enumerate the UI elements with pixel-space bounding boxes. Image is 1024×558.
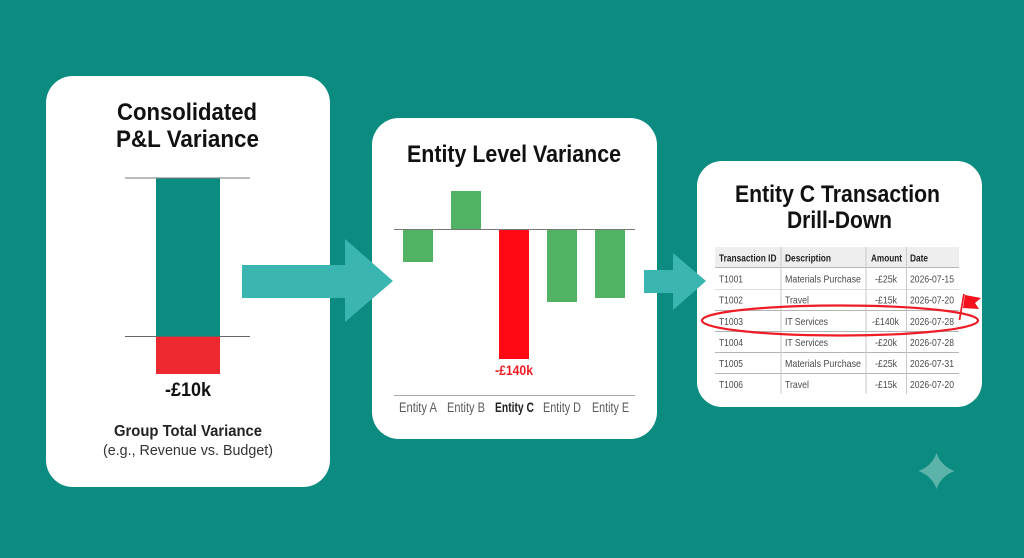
heading: consolidated P&L variance: P&L Variance <box>116 126 259 153</box>
table header: Transaction ID <box>719 252 777 264</box>
table row T1005 <box>719 358 954 370</box>
panel: entity C transaction drill-down <box>697 161 982 407</box>
panel: consolidated P&L variance <box>46 76 330 487</box>
table row T1002: 2026-07-20 <box>910 294 954 306</box>
table row T1005: -£25k <box>875 358 898 370</box>
axis labels: entities: Entity A <box>399 400 437 415</box>
axis labels: entities: Entity D <box>543 400 581 415</box>
table row T1004 <box>719 337 954 349</box>
table row T1002 <box>719 294 954 306</box>
caption: group total variance: (e.g., Revenue vs. Budget) <box>103 442 273 459</box>
table row T1003: T1003 <box>719 316 743 328</box>
table row T1006: -£15k <box>875 379 898 391</box>
heading: consolidated P&L variance: Consolidated <box>117 99 257 126</box>
table row T1003: -£140k <box>872 316 900 328</box>
arrow: entity level to transactions <box>644 253 706 310</box>
icon: red flag <box>960 294 981 320</box>
table row T1003: IT Services <box>785 316 828 328</box>
callout: T1003 highlight ellipse <box>702 306 978 336</box>
table row T1006 <box>719 379 954 391</box>
value label: -£140k: -£140k <box>495 363 533 378</box>
table row T1005: 2026-07-31 <box>910 358 954 370</box>
value label: -£10k: -£10k <box>165 380 211 401</box>
table row T1001: Materials Purchase <box>785 274 861 286</box>
table row T1001 <box>719 274 954 286</box>
arrow: consolidated to entity level <box>242 239 393 322</box>
table row T1006: T1006 <box>719 379 743 391</box>
axis labels: entities: Entity B <box>447 400 485 415</box>
heading: entity level variance: Entity Level Variance <box>407 141 621 168</box>
heading: entity C transaction drill-down: Entity C Transaction <box>735 181 940 208</box>
table row T1004: T1004 <box>719 337 743 349</box>
table row T1004: 2026-07-28 <box>910 337 954 349</box>
caption: group total variance: Group Total Variance <box>114 423 262 440</box>
table row T1005: T1005 <box>719 358 743 370</box>
heading: entity C transaction drill-down <box>735 181 940 234</box>
heading: entity C transaction drill-down: Drill-Down <box>787 207 892 234</box>
caption: group total variance <box>103 423 273 459</box>
table row T1001: -£25k <box>875 274 898 286</box>
table header: Amount <box>871 252 902 264</box>
axis labels: entities: Entity E <box>592 400 629 415</box>
axis labels: entities <box>399 400 629 415</box>
table row T1001: 2026-07-15 <box>910 274 954 286</box>
icon: sparkle <box>918 453 954 489</box>
chart: group total variance bar <box>125 178 250 374</box>
table row T1002: Travel <box>785 294 809 306</box>
table header: Date <box>910 252 928 264</box>
table row T1004: -£20k <box>875 337 898 349</box>
table row T1005: Materials Purchase <box>785 358 861 370</box>
table row T1006: Travel <box>785 379 809 391</box>
table header: Description <box>785 252 831 264</box>
axis labels: entities: Entity C <box>495 400 534 415</box>
table row T1002: -£15k <box>875 294 898 306</box>
heading: consolidated P&L variance <box>116 99 259 153</box>
table: transactions <box>715 247 959 394</box>
table header <box>719 252 928 264</box>
table row T1002: T1002 <box>719 294 743 306</box>
table row T1003 <box>719 316 954 328</box>
table row T1004: IT Services <box>785 337 828 349</box>
table row T1001: T1001 <box>719 274 743 286</box>
table row T1003: 2026-07-28 <box>910 316 954 328</box>
table row T1006: 2026-07-20 <box>910 379 954 391</box>
panel: entity level variance <box>372 118 657 439</box>
bar chart: entity variances <box>394 191 635 396</box>
